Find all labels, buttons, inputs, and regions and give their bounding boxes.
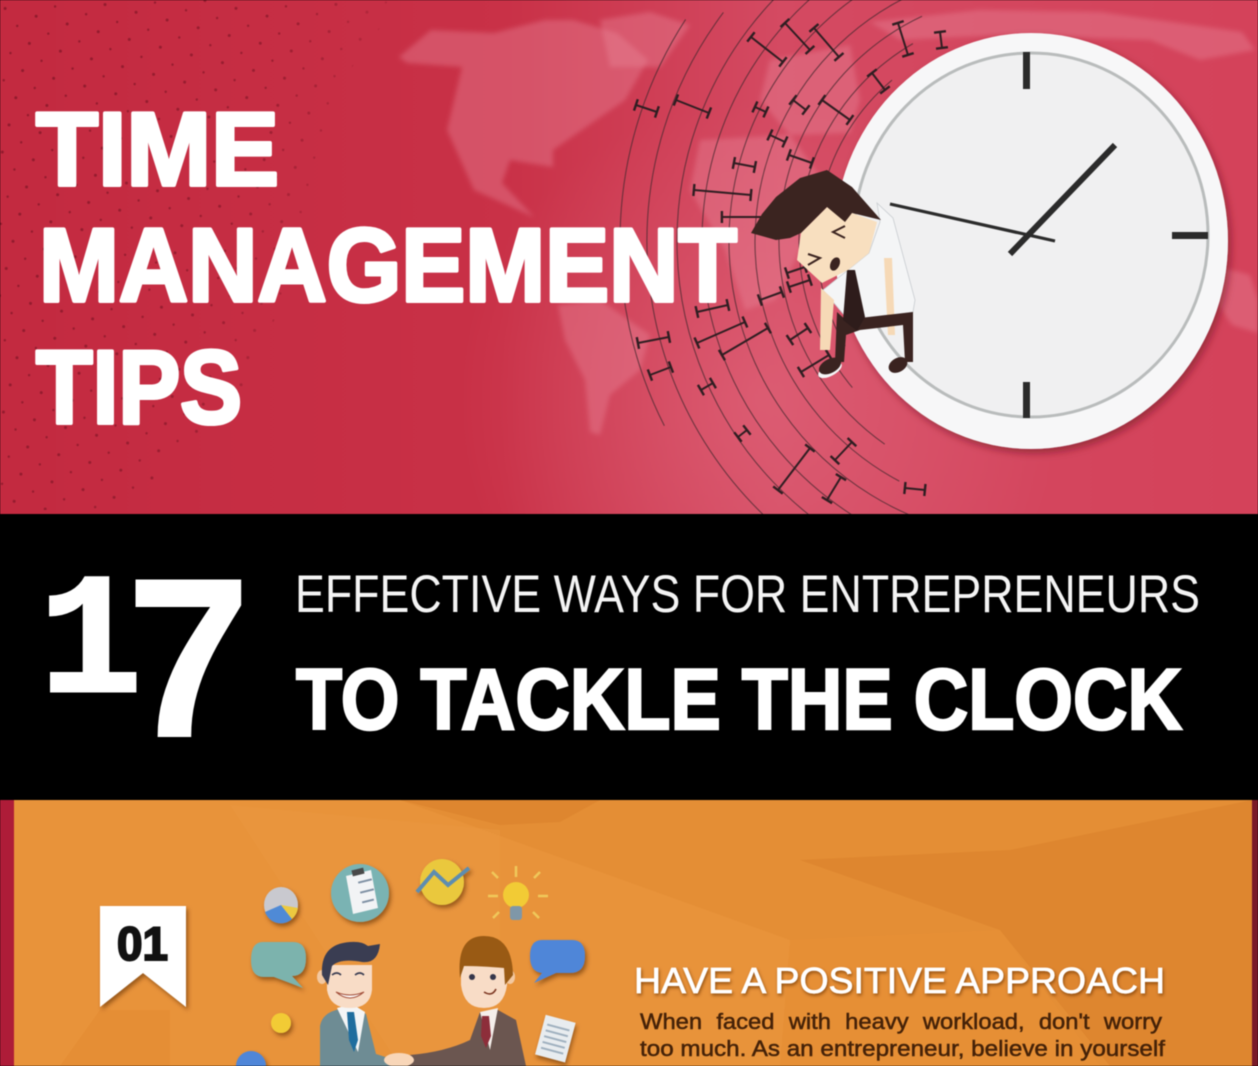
dotted pattern [0,0,420,510]
arcs radiating from clock [619,0,923,515]
right arm [884,258,895,335]
icon: trend chart [417,859,469,905]
arc tick marks [636,23,942,500]
tip body text: too much. As an entrepreneur, believe in yourself [640,1036,1166,1061]
big number 17: 7 [127,533,250,785]
clock hour ticks [1023,52,1208,418]
icon: light bulb [488,866,548,920]
icon: pie chart [264,887,298,923]
big number 17 [39,533,250,785]
face [797,207,877,283]
panel: tip 01 [0,800,1258,1066]
icon: document [535,1015,576,1062]
icon: blue globe [236,1051,266,1066]
tip body text: When faced with heavy workload, don't worry [640,1009,1162,1034]
title: TIME [36,92,279,208]
tie [843,270,865,331]
shirt [823,203,915,322]
shoes [817,363,842,379]
black banner [0,514,1258,800]
title: MANAGEMENT [39,208,737,324]
title: TIPS [36,330,242,446]
man leaning on clock [751,170,915,381]
icon: teal speech bubble [251,942,306,988]
trousers [835,312,913,362]
left arm [820,288,834,350]
title [34,110,738,427]
ribbon badge 01: 01 [117,917,168,970]
left businessman [317,942,395,1066]
icon: blue speech bubble [530,940,585,983]
right businessman [408,936,526,1066]
ribbon badge 01 [100,906,186,1007]
hair [751,170,881,240]
illustration: business handshake [236,859,585,1066]
icon: coin [271,1013,291,1033]
eyes and mouth [808,226,845,271]
tip body text [640,1009,1166,1061]
handshake [384,1053,414,1066]
hero panel [0,0,1258,515]
clock hands [890,145,1115,254]
big number 17: 1 [39,548,142,743]
tip heading: HAVE A POSITIVE APPROACH [634,960,1165,1001]
icon: clipboard [331,864,389,922]
world map [399,10,1258,435]
clock face [834,33,1228,449]
clock [834,33,1228,449]
